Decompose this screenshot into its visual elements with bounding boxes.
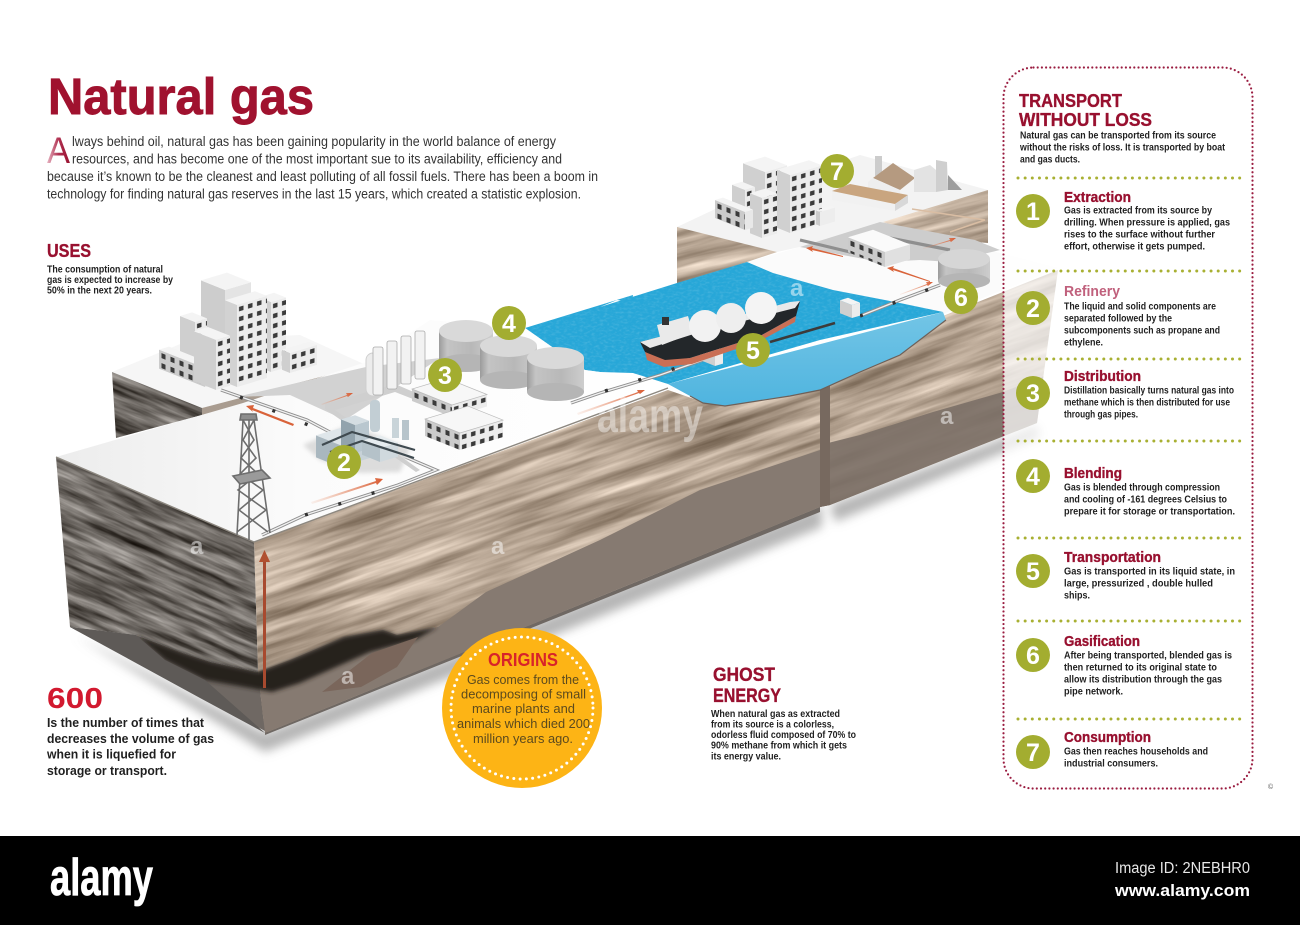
step 3 distribution: Distribution bbox=[1064, 369, 1141, 385]
storage tanks bbox=[439, 320, 584, 401]
footer logo: alamy bbox=[50, 849, 153, 907]
ghost energy note: odorless fluid composed of 70% to bbox=[711, 730, 856, 741]
step 1 extraction: Gas is extracted from its source by bbox=[1064, 206, 1212, 216]
city buildings left bbox=[159, 273, 317, 390]
600 statistic bbox=[46, 683, 214, 778]
city buildings right bbox=[715, 157, 835, 238]
main block bbox=[56, 328, 820, 735]
extraction arrow bbox=[259, 550, 270, 688]
panel heading: TRANSPORT bbox=[1019, 90, 1123, 111]
drop cap: A bbox=[47, 130, 70, 171]
step 6 gasification bbox=[1016, 634, 1232, 698]
origins badge: animals which died 200 bbox=[457, 716, 590, 731]
piers bbox=[700, 298, 860, 366]
uses note: USES bbox=[47, 241, 91, 261]
road bbox=[236, 358, 440, 420]
step 7 consumption: Gas then reaches households and bbox=[1064, 746, 1208, 758]
step 5 transportation bbox=[1016, 550, 1235, 602]
step 5 transportation: 5 bbox=[1026, 558, 1040, 586]
step 1 extraction: Extraction bbox=[1064, 190, 1131, 206]
origins badge: marine plants and bbox=[472, 701, 575, 716]
intro paragraph: lways behind oil, natural gas has been gaining popularity in the world balance of energy bbox=[72, 134, 556, 149]
undersea pipe bbox=[770, 323, 835, 342]
marker 2: 2 bbox=[337, 449, 351, 477]
step 4 blending: Gas is blended through compression bbox=[1064, 482, 1220, 494]
ghost energy note: 90% methane from which it gets bbox=[711, 740, 847, 752]
step 4 blending: Blending bbox=[1064, 466, 1122, 482]
refinery plant bbox=[303, 384, 437, 473]
step 2 refinery: 2 bbox=[1026, 295, 1040, 323]
600 statistic: when it is liquefied for bbox=[46, 746, 176, 762]
flow arrows bbox=[246, 238, 956, 504]
gasification plant bbox=[848, 230, 990, 289]
intro paragraph: resources, and has become one of the most important sue to its availability, efficiency and bbox=[72, 152, 562, 166]
step 1 extraction: effort, otherwise it gets pumped. bbox=[1064, 242, 1205, 252]
front rock face bbox=[254, 390, 820, 733]
ghost energy note: GHOST bbox=[713, 665, 775, 686]
step dividers bbox=[1018, 178, 1240, 719]
origins badge: million years ago. bbox=[473, 731, 573, 746]
step 6 gasification: pipe network. bbox=[1064, 686, 1123, 698]
origins badge: ORIGINS bbox=[488, 650, 558, 670]
ground shadows bbox=[75, 425, 1040, 752]
water cross-section bbox=[668, 312, 946, 406]
step 6 gasification: allow its distribution through the gas bbox=[1064, 674, 1222, 686]
step markers on the illustration bbox=[327, 154, 978, 479]
step 3 distribution bbox=[1016, 369, 1234, 420]
back right block with city and factory bbox=[677, 155, 988, 283]
step 6 gasification: Gasification bbox=[1064, 634, 1140, 650]
step 4 blending: prepare it for storage or transportation. bbox=[1064, 506, 1235, 518]
step 6 gasification: After being transported, blended gas is bbox=[1064, 650, 1232, 662]
step 5 transportation: ships. bbox=[1064, 590, 1090, 602]
marker 5 bbox=[736, 333, 770, 367]
step 4 blending: 4 bbox=[1026, 463, 1040, 491]
step 1 extraction: 1 bbox=[1026, 198, 1040, 226]
marker 3: 3 bbox=[438, 362, 452, 390]
step 2 refinery bbox=[1016, 284, 1220, 348]
panel heading: Natural gas can be transported from its source bbox=[1020, 130, 1216, 142]
origins badge: Gas comes from the bbox=[467, 672, 579, 687]
gas domes bbox=[689, 310, 721, 342]
stock watermarks: a bbox=[940, 403, 954, 430]
image id: Image ID: 2NEBHR0 bbox=[1115, 860, 1250, 877]
back left block with city bbox=[112, 273, 362, 438]
600 statistic: Is the number of times that bbox=[47, 715, 205, 730]
marker 3 bbox=[428, 358, 462, 392]
gas pocket bbox=[136, 627, 438, 692]
cryogenic towers bbox=[366, 331, 425, 396]
low buildings bbox=[412, 378, 503, 450]
bottom plate bbox=[70, 452, 820, 735]
left rock face bbox=[56, 458, 258, 672]
footer url: www.alamy.com bbox=[1114, 881, 1250, 900]
ghost energy note: When natural gas as extracted bbox=[711, 709, 840, 720]
rock face bbox=[820, 270, 1058, 507]
stock watermarks: a bbox=[190, 533, 204, 560]
step 5 transportation: Gas is transported in its liquid state, in bbox=[1064, 566, 1235, 578]
step 3 distribution: methane which is then distributed for use bbox=[1064, 398, 1230, 408]
marker 4 bbox=[492, 306, 526, 340]
second block right: rock and land bbox=[747, 222, 1058, 507]
step 7 consumption bbox=[1016, 730, 1208, 770]
stock watermarks: a bbox=[491, 533, 505, 560]
ghost energy note: ENERGY bbox=[713, 686, 781, 707]
step 4 blending: and cooling of -161 degrees Celsius to bbox=[1064, 494, 1227, 506]
marker 4: 4 bbox=[502, 310, 516, 338]
uses note bbox=[47, 241, 173, 296]
panel heading: without the risks of loss. It is transported by boat bbox=[1019, 142, 1226, 154]
step 5 transportation: Transportation bbox=[1064, 550, 1161, 566]
step 3 distribution: Distillation basically turns natural gas into bbox=[1064, 386, 1234, 396]
gap between blocks bbox=[820, 386, 830, 507]
marker 2 bbox=[327, 445, 361, 479]
stock watermarks: a bbox=[790, 275, 804, 302]
bridge bbox=[657, 316, 693, 345]
step 3 distribution: through gas pipes. bbox=[1064, 410, 1138, 420]
marker 5: 5 bbox=[746, 337, 760, 365]
LNG tanker bbox=[640, 292, 800, 367]
600 statistic: storage or transport. bbox=[47, 763, 167, 778]
step 2 refinery: The liquid and solid components are bbox=[1064, 302, 1216, 312]
land surface bbox=[747, 222, 1058, 314]
uses note: The consumption of natural bbox=[47, 264, 163, 276]
step 6 gasification: 6 bbox=[1026, 642, 1040, 670]
intro paragraph: technology for finding natural gas reserves in the last 15 years, which created a statistic explosion. bbox=[47, 186, 581, 202]
water surface bbox=[525, 262, 943, 384]
step 1 extraction bbox=[1016, 190, 1230, 252]
panel heading bbox=[1019, 90, 1226, 166]
pipelines bbox=[221, 238, 950, 535]
stock watermarks: alamy bbox=[597, 390, 703, 443]
step 4 blending bbox=[1016, 459, 1235, 518]
step 1 extraction: drilling. When pressure is applied, gas bbox=[1064, 218, 1230, 228]
ghost energy note: from its source is a colorless, bbox=[711, 720, 834, 730]
step 1 extraction: rises to the surface without further bbox=[1064, 230, 1215, 240]
stock photo footer bbox=[0, 836, 1300, 925]
panel frame bbox=[1004, 68, 1252, 788]
hull bbox=[640, 301, 800, 362]
sea bbox=[525, 262, 943, 384]
marker 6: 6 bbox=[954, 284, 968, 312]
ghost energy note bbox=[711, 665, 856, 762]
600 statistic: 600 bbox=[47, 683, 103, 715]
step 2 refinery: subcomponents such as propane and bbox=[1064, 326, 1220, 336]
step 7 consumption: Consumption bbox=[1064, 730, 1151, 746]
step 5 transportation: large, pressurized , double hulled bbox=[1064, 578, 1213, 590]
step 7 consumption: industrial consumers. bbox=[1064, 758, 1158, 770]
600 statistic: decreases the volume of gas bbox=[47, 731, 214, 746]
illustration: gas supply chain cross-section bbox=[0, 128, 1157, 852]
step 3 distribution: 3 bbox=[1026, 380, 1040, 408]
panel heading: and gas ducts. bbox=[1020, 154, 1080, 166]
marker 7: 7 bbox=[830, 158, 844, 186]
step 7 consumption: 7 bbox=[1026, 739, 1040, 767]
uses note: gas is expected to increase by bbox=[47, 275, 173, 286]
marker 6 bbox=[944, 280, 978, 314]
panel heading: WITHOUT LOSS bbox=[1019, 109, 1152, 130]
origins badge bbox=[442, 628, 602, 788]
copyright mark: © bbox=[1268, 783, 1274, 791]
intro paragraph bbox=[47, 130, 598, 202]
stock watermarks: a bbox=[341, 663, 355, 690]
step 2 refinery: Refinery bbox=[1064, 284, 1120, 300]
title: Natural gas bbox=[48, 68, 314, 125]
step 6 gasification: then returned to its original state to bbox=[1064, 662, 1217, 674]
lower stratum bbox=[258, 450, 820, 740]
uses note: 50% in the next 20 years. bbox=[47, 286, 152, 296]
origins badge: decomposing of small bbox=[461, 686, 586, 702]
intro paragraph: because it’s known to be the cleanest and least polluting of all fossil fuels. There has been a boom in bbox=[47, 169, 598, 184]
stock watermarks bbox=[190, 275, 954, 690]
ghost energy note: its energy value. bbox=[711, 752, 781, 762]
land surface bbox=[56, 320, 668, 542]
step 2 refinery: ethylene. bbox=[1064, 338, 1103, 348]
panel: transport without loss bbox=[1004, 68, 1252, 788]
step 2 refinery: separated followed by the bbox=[1064, 314, 1172, 324]
derrick bbox=[233, 414, 270, 540]
marker 7 bbox=[820, 154, 854, 188]
factory bbox=[832, 156, 985, 232]
